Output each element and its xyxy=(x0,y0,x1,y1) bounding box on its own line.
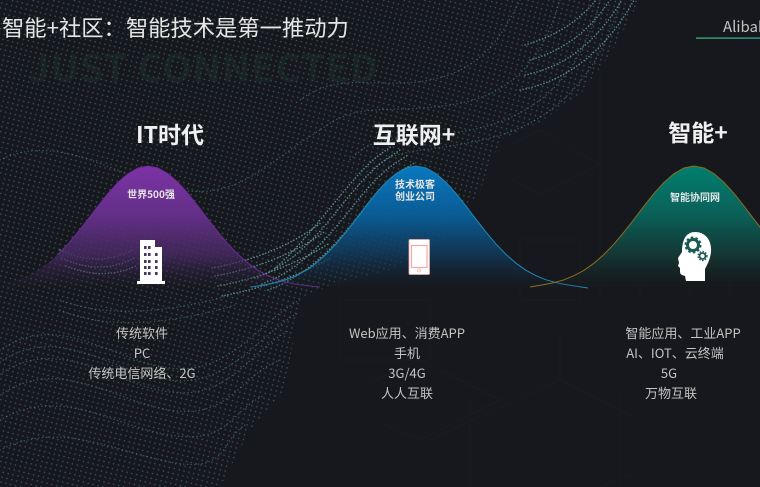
heading: intelligence plus: 智能+ xyxy=(668,114,728,148)
bell: internet, blue xyxy=(251,166,588,288)
list: IT era: 传统软件 xyxy=(116,323,168,342)
list: intelligence plus: 万物互联 xyxy=(645,383,697,402)
bell label: Fortune 500: 世界500强 xyxy=(127,186,175,201)
title: 智能+社区：智能技术是第一推动力 xyxy=(2,11,349,43)
bell: IT era, purple xyxy=(0,166,320,287)
list: internet plus xyxy=(349,323,465,402)
list: internet plus: 3G/4G xyxy=(388,363,426,382)
bell label: tech startups: 创业公司 xyxy=(395,188,435,203)
list: IT era: 传统电信网络、2G xyxy=(88,363,196,382)
list: internet plus: 人人互联 xyxy=(381,383,433,402)
bell label: tech startups: 技术极客 xyxy=(395,176,435,191)
icon: head with gears xyxy=(678,232,711,281)
header rule xyxy=(696,38,760,39)
bell label: tech startups xyxy=(395,176,435,203)
list: IT era: PC xyxy=(134,343,150,362)
list: IT era xyxy=(88,323,196,382)
list: intelligence plus xyxy=(625,323,741,402)
heading: internet plus: 互联网+ xyxy=(373,116,455,150)
list: internet plus: 手机 xyxy=(394,343,420,362)
bell label: intelligent collaboration network: 智能协同网 xyxy=(670,189,720,204)
bell: intelligence, green with gold outline xyxy=(530,166,760,287)
icon: office building xyxy=(137,240,165,284)
list: internet plus: Web应用、消费APP xyxy=(349,323,465,342)
list: intelligence plus: 5G xyxy=(661,363,677,382)
ghost watermark text: JUST CONNECTED xyxy=(28,38,378,93)
list: intelligence plus: 智能应用、工业APP xyxy=(625,323,741,342)
list: intelligence plus: AI、IOT、云终端 xyxy=(626,343,724,362)
heading: IT era: IT时代 xyxy=(136,116,204,150)
icon: smartphone xyxy=(409,240,430,274)
